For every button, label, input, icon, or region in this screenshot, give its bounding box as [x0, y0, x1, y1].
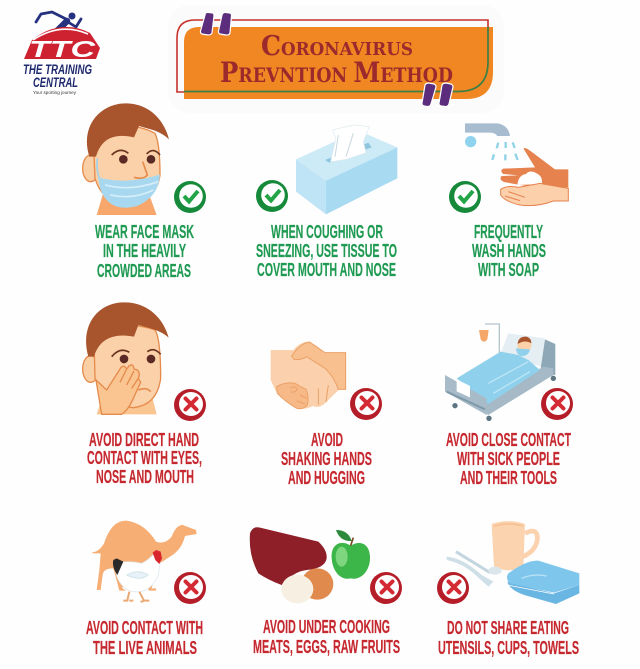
banner: opening quote marks	[200, 12, 232, 35]
text: wash hands: WITH SOAP	[478, 260, 539, 280]
text: wear face mask	[95, 222, 194, 281]
icon: liver, eggs and apple	[250, 527, 370, 603]
banner: green outline	[184, 27, 488, 92]
panel: avoid live animals	[86, 521, 206, 658]
logo: red arch with TTC: TTC	[29, 36, 96, 62]
icon: handshake	[271, 342, 346, 409]
icon: cross badge	[370, 572, 402, 604]
logo: runner	[36, 12, 81, 35]
banner: closing quote marks	[422, 83, 453, 107]
logo: The Training Central	[23, 12, 100, 95]
panel: use tissue	[256, 125, 397, 280]
logo: name: CENTRAL	[33, 75, 78, 90]
icon: hospital bed	[445, 323, 556, 421]
text: avoid live animals	[86, 618, 203, 658]
text: avoid handshakes: AVOID	[311, 430, 343, 450]
text: avoid handshakes	[281, 430, 372, 488]
text: use tissue	[256, 222, 397, 280]
text: do not share utensils	[438, 618, 579, 658]
text: avoid under cooking	[253, 617, 400, 657]
icon: face with mask	[83, 103, 169, 215]
panel: wash hands	[449, 123, 568, 280]
icon: cross badge	[174, 389, 206, 421]
text: wash hands: FREQUENTLY	[474, 222, 543, 242]
text: wear face mask: IN THE HEAVILY	[103, 241, 186, 261]
panel: avoid handshakes	[271, 342, 382, 488]
panel: avoid touching face	[83, 302, 206, 487]
banner: red outline	[177, 20, 488, 92]
logo: name	[23, 62, 92, 90]
icon: cross badge	[350, 388, 382, 420]
text: avoid touching face: NOSE AND MOUTH	[96, 467, 194, 487]
text: use tissue: COVER MOUTH AND NOSE	[257, 260, 396, 280]
panel: do not share utensils	[437, 521, 579, 658]
text: avoid under cooking: AVOID UNDER COOKING	[263, 617, 390, 637]
icon: check badge	[449, 181, 481, 213]
text: avoid sick contact: AND THEIR TOOLS	[460, 468, 557, 488]
icon: camel and chicken	[92, 521, 197, 602]
text: avoid live animals: THE LIVE ANIMALS	[93, 638, 197, 658]
text: avoid touching face: CONTACT WITH EYES,	[87, 448, 202, 468]
banner: title line 1: CORONAVIRUS	[261, 31, 413, 62]
icon: cross badge	[437, 572, 469, 604]
text: use tissue: WHEN COUGHING OR	[271, 222, 383, 242]
text: wash hands: WASH HANDS	[472, 241, 546, 261]
text: avoid sick contact: WITH SICK PEOPLE	[457, 449, 560, 469]
icon: face with hand	[83, 302, 169, 414]
text: wear face mask: CROWDED AREAS	[97, 261, 191, 281]
icon: mug, cutlery and towels	[447, 521, 579, 604]
icon: check badge	[174, 181, 206, 213]
icon: tissue box	[296, 125, 397, 214]
text: avoid touching face	[87, 430, 202, 487]
panel: avoid under cooking	[250, 527, 402, 657]
icon: faucet and hands	[465, 123, 568, 206]
text: wear face mask: WEAR FACE MASK	[95, 222, 194, 242]
text: avoid handshakes: SHAKING HANDS	[281, 449, 372, 469]
text: wash hands	[472, 222, 546, 280]
icon: cross badge	[174, 572, 206, 604]
logo: tagline: Your sporting journey	[33, 90, 77, 95]
text: avoid sick contact	[446, 430, 571, 488]
panel: avoid sick contact	[445, 323, 573, 488]
text: avoid live animals: AVOID CONTACT WITH	[86, 618, 203, 638]
logo: name: THE TRAINING	[23, 62, 92, 77]
text: avoid touching face: AVOID DIRECT HAND	[89, 430, 199, 450]
text: avoid under cooking: MEATS, EGGS, RAW FRUITS	[253, 637, 400, 657]
icon: cross badge	[541, 388, 573, 420]
icon: check badge	[256, 180, 288, 212]
text: avoid handshakes: AND HUGGING	[288, 468, 365, 488]
text: use tissue: SNEEZING, USE TISSUE TO	[256, 241, 397, 261]
banner: orange plate	[184, 27, 493, 99]
banner: title line 2: PREVNTION METHOD	[220, 56, 453, 89]
title banner	[168, 5, 504, 113]
panel: wear face mask	[83, 103, 206, 281]
